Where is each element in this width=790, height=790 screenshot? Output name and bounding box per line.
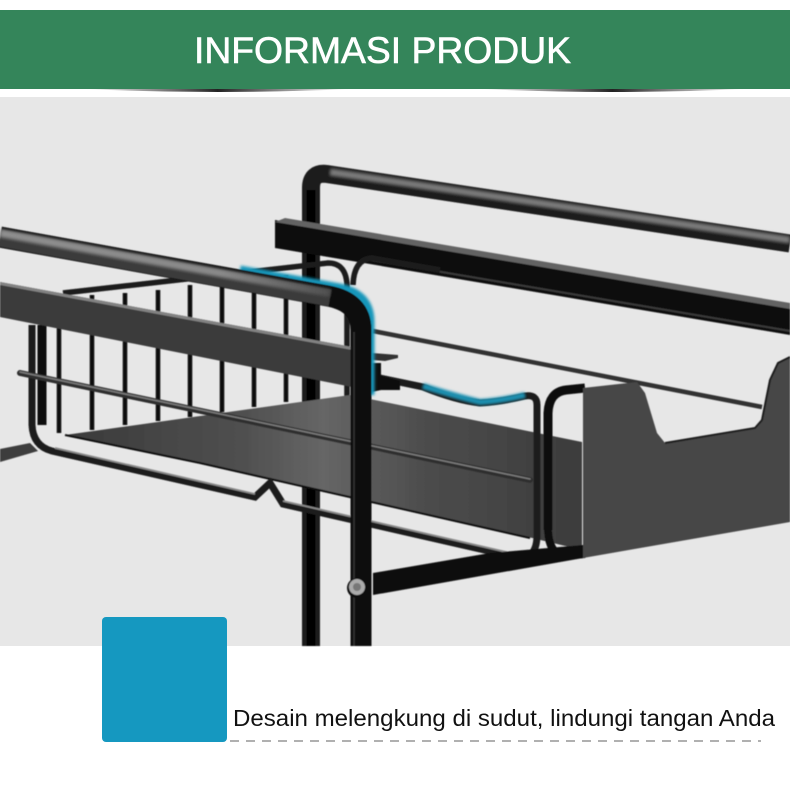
basket shelf (65, 395, 582, 550)
curved corner highlight: blue (240, 270, 525, 402)
rear flat bar (275, 218, 790, 335)
floor bar (0, 443, 38, 462)
notch edge (665, 357, 790, 443)
bottom cross bar (373, 545, 583, 595)
caption dashed line (230, 740, 761, 742)
product photo: storage rack (0, 172, 790, 646)
front flat bar (0, 282, 352, 387)
post bolt (347, 578, 367, 598)
banner shadow (85, 89, 745, 92)
shelf front edge (65, 435, 530, 538)
end panel (583, 357, 790, 558)
front post and top rail (0, 233, 361, 646)
caption: Desain melengkung di sudut, lindungi tangan Anda (233, 705, 776, 731)
blue callout square (102, 617, 227, 742)
clip bar (372, 363, 400, 392)
right wire frame (548, 388, 585, 556)
banner title: INFORMASI PRODUK (194, 30, 571, 71)
left wire frame (32, 325, 537, 558)
rear basket wires (59, 258, 440, 433)
rear post and top rail (311, 172, 790, 646)
product photo panel (0, 97, 790, 646)
bracket (372, 353, 398, 361)
header banner (0, 10, 790, 89)
front thin rail (20, 372, 530, 480)
rear thin rail (373, 331, 762, 407)
